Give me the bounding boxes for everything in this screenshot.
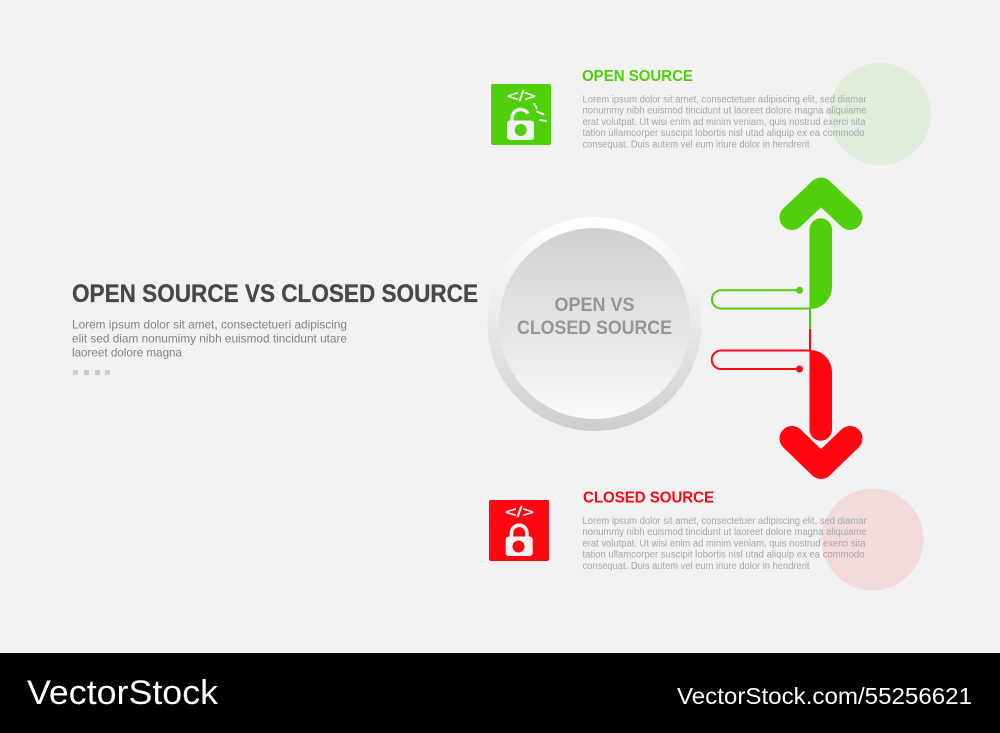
central disc: CLOSED SOURCE	[517, 318, 672, 339]
decorative circle: red	[822, 488, 924, 590]
text: open source description: erat volutpat. Ut wisi enim ad minim veniam, quis nostrud exerci sita	[582, 117, 866, 128]
central disc	[488, 217, 702, 431]
icon: closed padlock: </>	[505, 504, 534, 521]
text: open source description: nonummy nibh euismod tincidunt ut laoreet dolore magna aliquiame	[582, 106, 867, 117]
arrow: up green	[712, 190, 850, 329]
intro text: elit sed diam nonumimy nibh euismod tincidunt utare	[72, 332, 347, 346]
panel: open source	[491, 63, 931, 165]
central disc: OPEN VS	[554, 295, 634, 316]
text: closed source description: consequat. Duis autem vel eum iriure dolor in hendrerit	[582, 561, 810, 572]
icon: open padlock	[491, 84, 551, 145]
text: closed source description: Lorem ipsum dolor sit amet, consectetuer adipiscing elit, sed diamar	[582, 516, 867, 527]
heading: open source: OPEN SOURCE	[582, 68, 693, 85]
text: closed source description: tation ullamcorper suscipit lobortis nisl utad aliquip ex ea commodo	[582, 550, 865, 561]
text: open source description: consequat. Duis autem vel eum iriure dolor in hendrerit	[582, 139, 810, 150]
heading: closed source: CLOSED SOURCE	[583, 490, 714, 506]
pagination dots	[73, 370, 110, 375]
text: closed source description: erat volutpat. Ut wisi enim ad minim veniam, quis nostrud exerci sita	[582, 538, 866, 550]
text: closed source description	[582, 516, 867, 572]
footer url: VectorStock.com/55256621	[677, 683, 972, 709]
text: open source description	[582, 94, 867, 150]
intro text	[72, 318, 347, 360]
footer brand: VectorStock	[27, 674, 219, 712]
footer bar	[0, 653, 1000, 733]
panel: intro	[72, 280, 478, 375]
text: closed source description: nonummy nibh euismod tincidunt ut laoreet dolore magna aliquiame	[582, 527, 867, 538]
arrow: down red	[712, 329, 850, 466]
panel: closed source	[489, 488, 924, 590]
decorative circle: green	[829, 63, 931, 165]
title: OPEN SOURCE VS CLOSED SOURCE	[72, 280, 478, 308]
intro text: laoreet dolore magna	[72, 346, 182, 360]
text: open source description: Lorem ipsum dolor sit amet, consectetuer adipiscing elit, sed diamar	[582, 94, 867, 106]
text: open source description: tation ullamcorper suscipit lobortis nisl utad aliquip ex ea commodo	[582, 128, 865, 139]
icon: open padlock: </>	[507, 88, 536, 105]
intro text: Lorem ipsum dolor sit amet, consectetueri adipiscing	[72, 318, 347, 332]
icon: closed padlock	[489, 500, 549, 561]
